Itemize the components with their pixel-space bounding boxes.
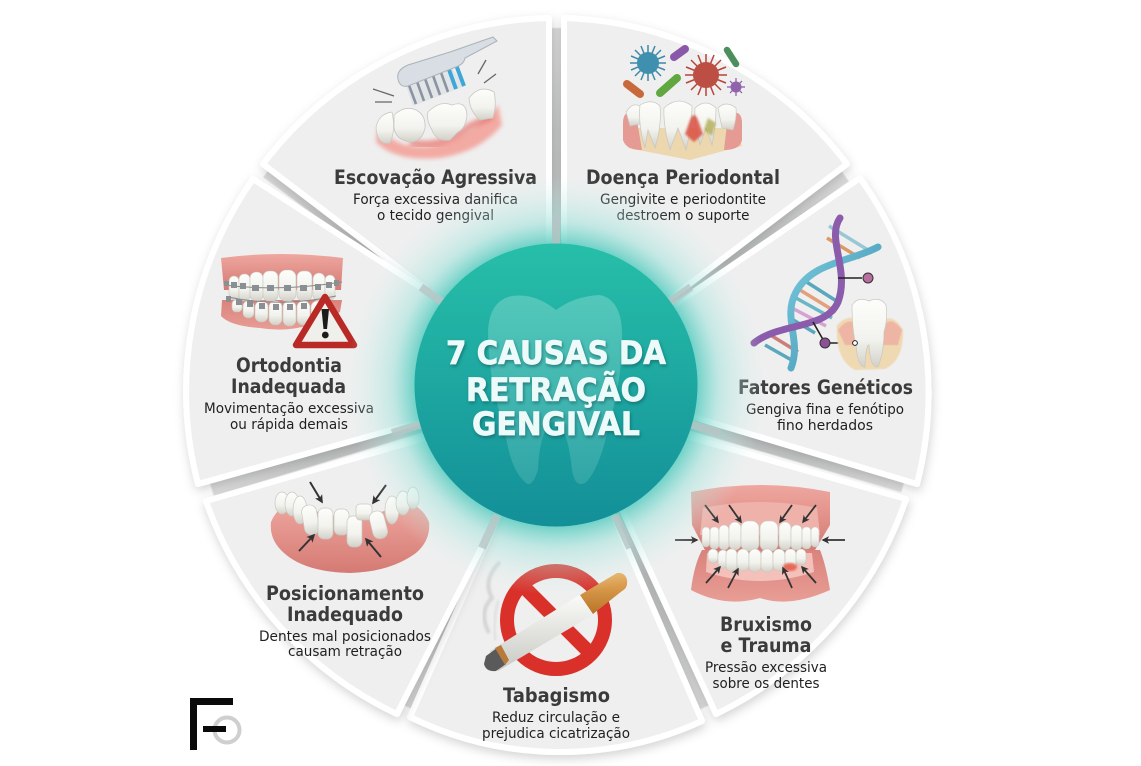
icon: bacteria — [627, 49, 736, 94]
title: GENGIVAL — [472, 405, 640, 443]
icon: misaligned teeth with arrows — [271, 482, 429, 573]
icon: germs over teeth — [623, 45, 745, 160]
heading: Fatores Genéticos — [738, 376, 913, 399]
description — [746, 402, 904, 434]
seam stubs through glow — [392, 215, 720, 548]
panel: Fatores Genéticos — [670, 178, 928, 484]
wedge background — [410, 513, 702, 752]
panel: Bruxismo e Trauma — [622, 436, 906, 714]
heading: Bruxismo — [720, 613, 812, 636]
wedge background — [186, 179, 445, 484]
heading: Tabagismo — [503, 684, 610, 707]
icon: purple virus — [727, 78, 745, 96]
heading: e Trauma — [720, 634, 812, 657]
icon: DNA helix and tooth — [754, 218, 903, 370]
description: Força excessiva danifica — [353, 192, 518, 208]
logo — [190, 698, 240, 750]
heading: Escovação Agressiva — [334, 166, 537, 189]
description: sobre os dentes — [712, 676, 820, 692]
description — [259, 629, 431, 660]
icon: braces with warning sign — [221, 254, 354, 345]
heading: Inadequado — [287, 603, 403, 626]
wedge background — [564, 18, 847, 305]
panel: Ortodontia Inadequada — [186, 179, 445, 484]
title: 7 CAUSAS DA — [446, 334, 666, 372]
icon: clenched teeth with arrows — [675, 485, 845, 602]
wedge background — [206, 438, 499, 714]
description: o tecido gengival — [377, 208, 494, 224]
title: RETRAÇÃO — [466, 371, 646, 409]
description: fino herdados — [777, 418, 873, 434]
seam shadows between wedges — [212, 28, 903, 708]
description: Movimentação excessiva — [204, 401, 374, 417]
description — [600, 192, 766, 224]
glow around centre disc — [346, 175, 766, 595]
description — [482, 710, 630, 742]
heading — [231, 354, 346, 398]
heading: Doença Periodontal — [586, 166, 780, 189]
wedge background — [622, 436, 906, 714]
icon: ghost tooth — [488, 295, 622, 484]
centre disc — [414, 244, 698, 526]
description — [705, 660, 827, 692]
panel: Posicionamento Inadequado — [206, 438, 499, 714]
description: prejudica cicatrização — [482, 726, 630, 742]
description: Gengiva fina e fenótipo — [746, 402, 904, 418]
icon: red virus — [685, 54, 727, 96]
description — [204, 401, 374, 433]
description: Reduz circulação e — [492, 710, 620, 726]
icon: no smoking sign — [484, 562, 627, 671]
heading: Posicionamento — [266, 582, 424, 605]
description — [353, 192, 518, 224]
panel: Doença Periodontal — [564, 18, 847, 305]
title — [446, 334, 666, 443]
icon: toothbrush on teeth — [373, 37, 502, 159]
description: ou rápida demais — [230, 417, 348, 433]
wedge background — [670, 178, 928, 484]
panel: Escovação Agressiva — [263, 18, 549, 303]
description: Gengivite e periodontite — [600, 192, 766, 208]
heading — [266, 582, 424, 626]
description: Pressão excessiva — [705, 660, 827, 676]
panel: Tabagismo — [410, 513, 702, 752]
description: Dentes mal posicionados — [259, 629, 431, 645]
heading: Ortodontia — [236, 354, 342, 377]
heading — [720, 613, 812, 657]
description: destroem o suporte — [616, 208, 750, 224]
description: causam retração — [288, 644, 402, 660]
heading: Inadequada — [231, 375, 346, 398]
icon: blue virus — [630, 45, 666, 81]
wedge background — [263, 18, 549, 303]
